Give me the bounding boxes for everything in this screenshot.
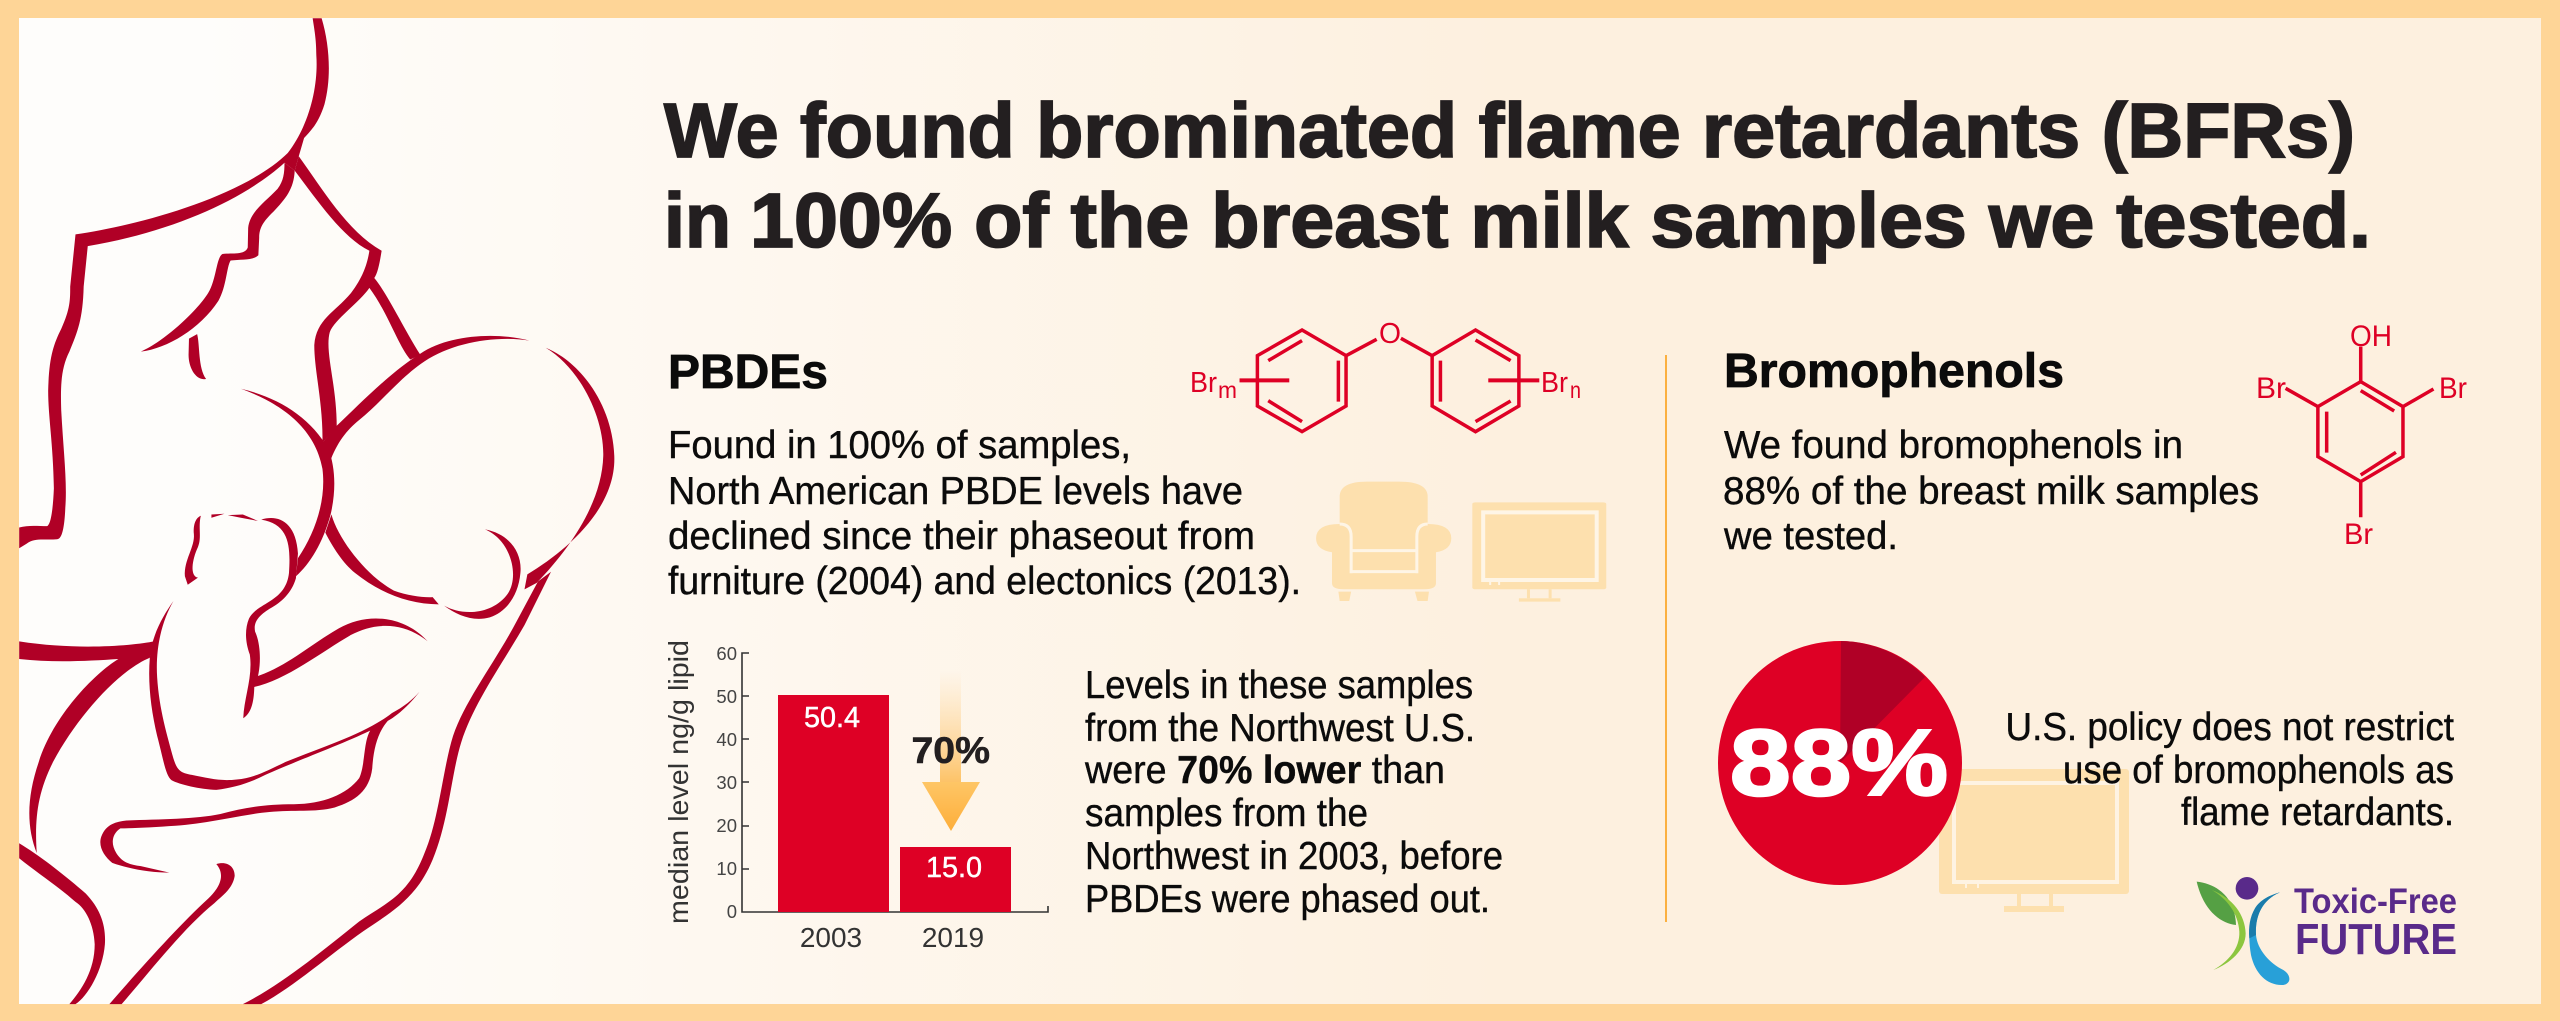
value: 15.0: 15.0 xyxy=(926,852,982,884)
Bromophenols description text xyxy=(1723,424,2259,558)
text: U.S. policy: flame retardants. xyxy=(2181,791,2454,834)
PBDEs description text xyxy=(668,424,1301,603)
y-axis tick labels: 50 xyxy=(716,686,737,707)
title: We found brominated flame retardants (BFRs) xyxy=(664,88,2355,174)
text: U.S. policy: use of bromophenols as xyxy=(2063,749,2454,792)
logo wordmark: Toxic-Free xyxy=(2294,882,2457,921)
text: levels comparison: from the Northwest U.S. xyxy=(1085,707,1475,750)
bar: 2019 xyxy=(900,847,1011,912)
axes and ticks xyxy=(742,653,1048,912)
PBDEs description text: furniture (2004) and electonics (2013). xyxy=(668,560,1301,603)
bromophenol molecule diagram: Br xyxy=(2344,518,2373,551)
text: levels comparison: PBDEs were phased out. xyxy=(1085,878,1490,921)
PBDEs description text: Found in 100% of samples, xyxy=(668,424,1131,467)
title xyxy=(664,88,2371,264)
y-axis tick labels: 40 xyxy=(716,729,737,750)
PBDE molecule diagram: m xyxy=(1218,377,1237,403)
Bromophenols description text: We found bromophenols in xyxy=(1724,424,2183,467)
PBDE molecule diagram: Br xyxy=(1190,367,1217,399)
logo: Toxic-Free Future xyxy=(2197,877,2457,985)
bromophenol molecule diagram: Br xyxy=(2256,372,2286,405)
bar: 2003 xyxy=(778,695,889,912)
pie chart: 88% xyxy=(1718,641,1962,885)
illustration: mother breastfeeding baby xyxy=(19,18,614,1004)
text: levels comparison: samples from the xyxy=(1085,792,1368,835)
PBDE molecule diagram: n xyxy=(1570,377,1581,403)
text: levels comparison xyxy=(1084,664,1503,921)
icon: television behind chart xyxy=(1939,769,2129,912)
divider xyxy=(1665,355,1667,922)
bar chart: median PBDE levels 2003 vs 2019 xyxy=(663,640,1048,953)
label: 70%: 70% xyxy=(912,730,990,771)
y-axis label: median level ng/g lipid xyxy=(663,640,694,924)
heading: PBDEs: PBDEs xyxy=(668,346,828,399)
label: 88%: 88% xyxy=(1730,710,1948,815)
y-axis tick labels xyxy=(716,643,737,922)
y-axis tick labels: 60 xyxy=(716,643,737,664)
bromophenol molecule diagram xyxy=(2256,320,2467,551)
title: 100% of the breast milk samples we tested. xyxy=(750,178,2371,264)
text: levels comparison: Levels in these samples xyxy=(1085,664,1473,707)
logo wordmark xyxy=(2294,882,2457,964)
text: levels comparison: Northwest in 2003, before xyxy=(1085,835,1503,878)
PBDE molecule diagram: O xyxy=(1379,318,1401,350)
PBDEs section xyxy=(668,318,1606,603)
y-axis tick labels: 0 xyxy=(727,901,737,922)
Bromophenols description text: we tested. xyxy=(1723,515,1898,558)
PBDEs description text: declined since their phaseout from xyxy=(668,515,1255,558)
x labels xyxy=(800,922,984,953)
icon: armchair xyxy=(1316,482,1451,601)
PBDEs description text: North American PBDE levels have xyxy=(668,470,1243,513)
title: in xyxy=(664,178,731,264)
text: levels comparison: were 70% lower than xyxy=(1084,749,1445,792)
logo icon xyxy=(2197,877,2289,985)
text: U.S. policy: U.S. policy does not restrict xyxy=(2006,706,2454,749)
arrow: 70% decline xyxy=(922,670,980,831)
logo wordmark: FUTURE xyxy=(2295,915,2457,964)
y-axis tick labels: 10 xyxy=(716,858,737,879)
text: U.S. policy xyxy=(2006,706,2454,834)
icon: television xyxy=(1472,502,1606,602)
Bromophenols section xyxy=(1718,320,2467,985)
y-axis tick labels: 20 xyxy=(716,815,737,836)
x labels: 2003 xyxy=(800,922,862,953)
PBDE molecule diagram: Br xyxy=(1541,367,1568,399)
value: 50.4: 50.4 xyxy=(804,702,860,734)
bromophenol molecule diagram: OH xyxy=(2350,320,2392,353)
x labels: 2019 xyxy=(922,922,984,953)
heading: Bromophenols: Bromophenols xyxy=(1724,345,2064,398)
PBDE molecule diagram xyxy=(1190,318,1581,432)
bromophenol molecule diagram: Br xyxy=(2439,372,2467,405)
Bromophenols description text: 88% of the breast milk samples xyxy=(1723,470,2259,513)
y-axis tick labels: 30 xyxy=(716,772,737,793)
